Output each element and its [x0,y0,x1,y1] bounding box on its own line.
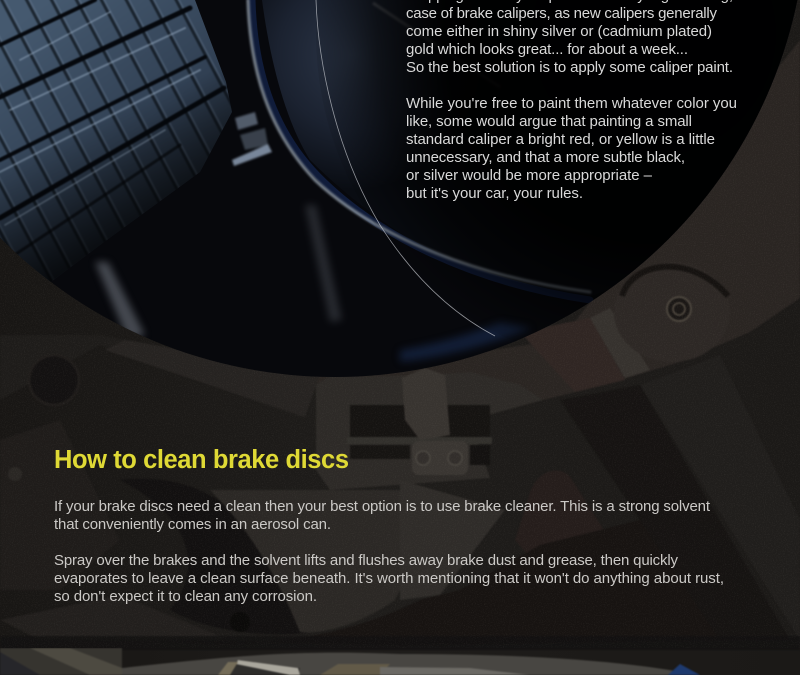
text block: caliper paint [406,0,737,202]
text block: brake cleaner instructions [54,498,724,605]
text block: caliper paint: standard caliper a bright red, or yellow is a little [406,131,715,148]
right diagonal shade [560,385,790,640]
lighter upper band around the caliper [316,40,800,430]
text block: caliper paint: but it's your car, your rules. [406,185,583,202]
text block: caliper paint: unnecessary, and that a more subtle black, [406,149,685,166]
tyre [0,0,232,280]
dark base above bottom strip [0,636,800,650]
thin circle outline [316,0,495,336]
text block: caliper paint: While you're free to paint them whatever color you [406,95,737,112]
blue sheen at bottom of wheel [400,322,532,362]
text block: caliper paint: So the best solution is to apply some caliper paint. [406,59,733,76]
lower caliper curved plate [0,470,720,645]
text block: caliper paint: come either in shiny silver or (cadmium plated) [406,23,712,40]
text block: brake cleaner instructions: Spray over the brakes and the solvent lifts and flushes away brake dust and grease, then quickly [54,552,678,569]
vertical blurred reflections [95,205,342,340]
brown tint strip [520,318,625,392]
text block: caliper paint: like, some would argue that painting a small [406,113,692,130]
rim edge [248,0,590,300]
piston bracket and bolts [402,368,468,475]
left bolt and dark arm [0,335,320,590]
text block: caliper paint: or silver would be more appropriate – [406,167,653,184]
text block: caliper paint: gold which looks great... for about a week... [406,41,688,58]
blue inner wheel panel [262,0,416,186]
bottom photo strip [0,648,700,675]
mounting dome with bolt [614,262,730,362]
tyre highlights [0,12,200,225]
heading: how to clean brake discs: How to clean brake discs [54,446,349,474]
text block: brake cleaner instructions: evaporates to leave a clean surface beneath. It's worth mentioning that it won't do anything about rust, [54,570,724,587]
caliper block [316,372,543,490]
text block: brake cleaner instructions: that conveniently comes in an aerosol can. [54,516,331,533]
top wheel photo, clipped to large circle [0,0,800,400]
dark text circle [322,0,798,304]
tyre grooves [0,0,224,258]
wheel spoke edge [372,2,424,36]
text block: brake cleaner instructions: If your brake discs need a clean then your best option is to use brake cleaner. This is a strong solvent [54,498,711,515]
text block: brake cleaner instructions: so don't expect it to clean any corrosion. [54,588,317,605]
brake hardware next to rim [232,112,272,166]
text block: caliper paint: case of brake calipers, as new calipers generally [406,5,718,22]
